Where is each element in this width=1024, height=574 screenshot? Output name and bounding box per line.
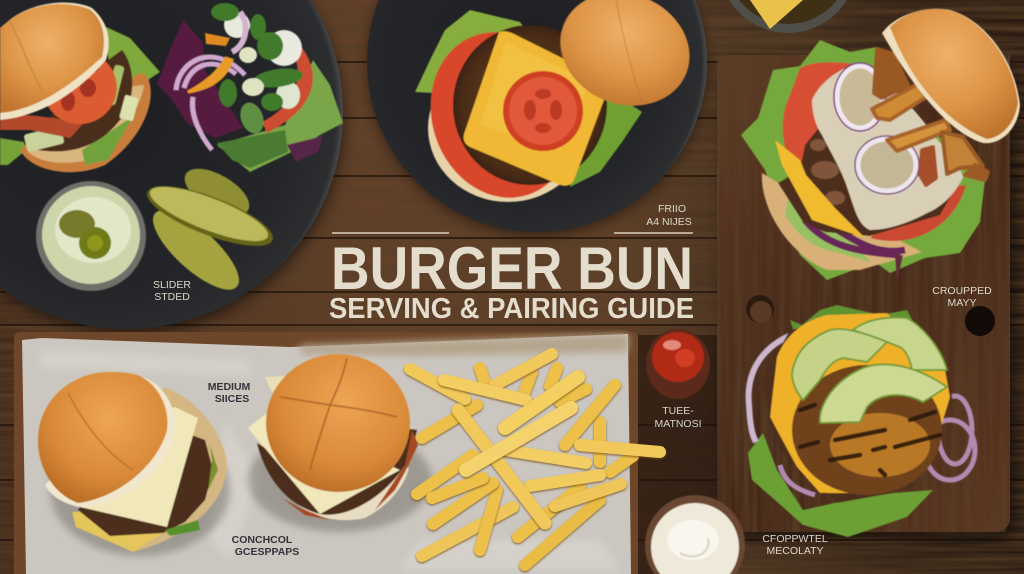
burger: cheese slider <box>38 372 230 556</box>
label: bottom board: MECOLATY <box>767 545 823 557</box>
title: BURGER BUN <box>331 235 693 302</box>
burger: cheeseburger with tomato <box>409 0 707 217</box>
label: cropped mayo: MAYY <box>948 297 976 309</box>
salad <box>157 3 343 172</box>
plate: slider and sides <box>0 0 343 333</box>
label: cropped mayo: CROUPPED <box>932 285 992 297</box>
board holes <box>746 295 995 336</box>
french fries <box>410 354 660 565</box>
label: ketchup: MATNOSI <box>654 418 702 430</box>
label: bottom board: CFOPPWTEL <box>762 533 828 545</box>
ketchup cup <box>646 329 710 399</box>
label: bottom tray: CONCHCOL <box>232 534 293 546</box>
lined tray with burgers and fries <box>14 332 660 574</box>
label: slider sides: STDED <box>154 291 190 303</box>
label: bottom tray: GCESPPAPS <box>235 546 299 558</box>
pickle spears <box>141 159 279 302</box>
burger: grilled avocado <box>748 305 975 537</box>
label: ketchup: TUEE- <box>662 405 694 417</box>
side bowl top <box>719 0 857 33</box>
serving board: right <box>717 9 1020 557</box>
dip bowl with pickles <box>36 181 146 291</box>
mayo cup <box>645 495 745 574</box>
label: fries: A4 NIJES <box>646 216 692 228</box>
label: slider sides: SLIDER <box>153 279 191 291</box>
burger: top-left slider <box>0 3 160 172</box>
label: fries: FRIIO <box>658 203 686 215</box>
subtitle: SERVING & PAIRING GUIDE <box>329 293 694 325</box>
label: medium slices: SIICES <box>215 393 249 405</box>
burger: round bun slider <box>248 354 432 532</box>
plate: cheeseburger <box>367 0 707 234</box>
burger: bacon onion <box>741 9 1020 283</box>
label: medium slices: MEDIUM <box>208 381 251 393</box>
title block <box>329 233 694 325</box>
